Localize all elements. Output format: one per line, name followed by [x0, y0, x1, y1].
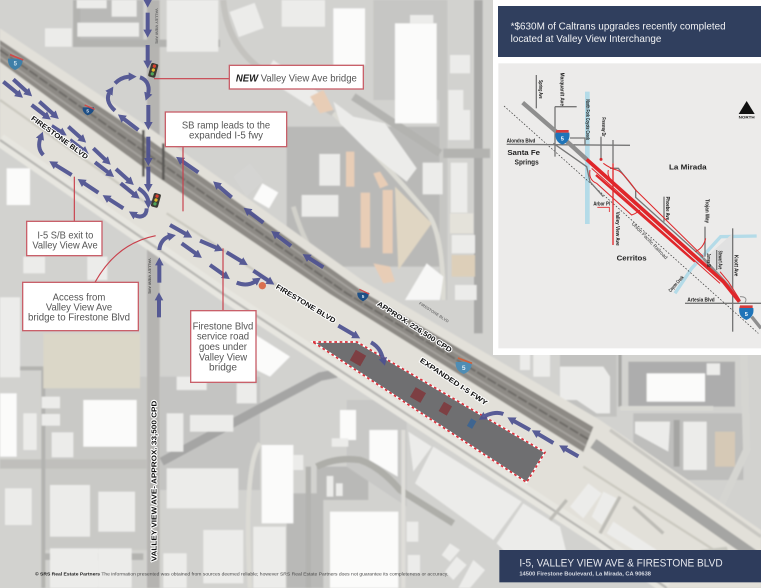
- icon: I-5 shield mid corridor: 5: [362, 294, 365, 299]
- road label: expanded I-5: EXPANDED I-5 FWY: [418, 357, 489, 407]
- traffic flow arrows: [3, 0, 578, 456]
- inset map labels: Freeway Dr: [600, 117, 606, 137]
- inset map labels: Stewart Ave: [717, 251, 723, 269]
- road labels: [29, 8, 489, 561]
- road label: small Firestone: FIRESTONE BLVD: [418, 301, 450, 324]
- railroad: [504, 106, 758, 333]
- shaded adjacent zone: [707, 233, 733, 293]
- callout: service road: bridge: [209, 363, 237, 374]
- callout: SB ramp: expanded I-5 fwy: [189, 131, 263, 142]
- inset map labels: Santa Fe: [507, 150, 540, 157]
- callout: I-5 exit: I-5 S/B exit to: [37, 231, 93, 242]
- inset location map: [498, 63, 761, 348]
- marker: Freeway Dr end point: [600, 158, 602, 161]
- icon: traffic light north: [148, 63, 159, 78]
- inset map labels: Arbor Pl: [593, 201, 611, 207]
- water: creeks: [587, 92, 757, 293]
- gray street grid: [507, 75, 761, 332]
- inset map labels: James St: [705, 253, 711, 268]
- road label: Firestone Blvd east: FIRESTONE BLVD: [274, 284, 336, 325]
- buildings south of the freeway east end: [550, 483, 733, 573]
- icon: traffic light south: [151, 193, 161, 208]
- callout: service road: goes under: [199, 342, 248, 353]
- callout: I-5 exit: Valley View Ave: [32, 240, 98, 251]
- icon: I-5 shield inset south: [739, 305, 754, 320]
- callout: I-5 exit: [27, 177, 102, 256]
- header text: *$630M of Caltrans upgrades recently completed: [511, 22, 726, 33]
- inset map labels: Alondra Blvd: [507, 138, 535, 144]
- inset map labels: Union Pacific Railroad: [630, 221, 669, 261]
- I-5 gray alignment: [523, 103, 761, 328]
- inset map labels: Knott Ave: [732, 255, 738, 277]
- icon: I-5 shield mid corridor: [357, 289, 369, 301]
- callout: new bridge: NEW Valley View Ave bridge: [236, 74, 357, 85]
- property address: 14500 Firestone Boulevard, La Mirada, CA 90638: [519, 571, 651, 577]
- callout: service road: [191, 248, 256, 382]
- road label: Firestone Blvd west: FIRESTONE BLVD: [29, 115, 89, 161]
- inset map labels: Valley View Ave: [614, 212, 620, 246]
- road label: small Valley View south: VALLEY VIEW AVE: [148, 258, 153, 294]
- inset map labels: Trojan Way: [704, 199, 710, 223]
- inset map labels: North Fork Coyote Creek: [584, 99, 590, 140]
- callout: service road: service road: [197, 332, 249, 343]
- inset map labels: Springs: [515, 159, 539, 166]
- icon: I-5 shield inset south: 5: [745, 312, 748, 318]
- callout: access to Firestone: Access from: [53, 293, 105, 304]
- icon: orange marker: [259, 282, 266, 289]
- callout: new bridge: [154, 65, 363, 89]
- red: upgraded I-5 corridor: [587, 159, 740, 302]
- icon: I-5 shield northwest: 5: [14, 62, 18, 68]
- subject site parcel: [313, 342, 545, 482]
- header text: located at Valley View Interchange: [511, 34, 661, 45]
- icon: north arrow: NORTH: [739, 116, 755, 120]
- icon: I-5 shield near bridge: [83, 105, 95, 115]
- callout: service road: Firestone Blvd: [193, 321, 253, 332]
- icon: I-5 shield inset north: [555, 130, 570, 145]
- road label: small Valley View north: VALLEY VIEW AVE: [154, 8, 159, 44]
- inset map labels: Marquardt Ave: [559, 73, 565, 106]
- icon: I-5 shield near bridge: 5: [86, 109, 89, 114]
- icon: I-5 shield southeast: [456, 358, 472, 374]
- road label: Valley View traffic count: VALLEY VIEW AVE- APPROX. 33,500 CPD: [152, 401, 159, 561]
- icon: I-5 shield inset north: 5: [561, 137, 564, 143]
- inset map labels: Coyote Creek: [668, 275, 686, 294]
- icon: I-5 shield northwest: [8, 55, 23, 70]
- property title banner: [499, 550, 761, 582]
- header text: [511, 22, 726, 45]
- header banner: [498, 6, 761, 57]
- callout: access to Firestone: [23, 236, 156, 331]
- inset map labels: Artesia Blvd: [687, 298, 715, 304]
- inset map labels: Phoebe Ave: [664, 197, 670, 220]
- callout: access to Firestone: bridge to Firestone Blvd: [28, 313, 130, 324]
- road label: I-5 traffic count: APPROX. 226,500 CPD: [376, 301, 453, 354]
- icon: I-5 shield southeast: 5: [462, 365, 466, 372]
- icon: north arrow: [739, 101, 755, 120]
- inset map labels: Spring Ave: [537, 80, 543, 99]
- inset map labels: Cerritos: [617, 256, 647, 263]
- disclaimer: © SRS Real Estate Partners The information presented was obtained from sources deemed reliable; however SRS Real Estate Partners does not guarantee its completeness or accuracy.: [35, 572, 448, 577]
- callout: access to Firestone: Valley View Ave: [46, 302, 112, 313]
- inset map labels: La Mirada: [669, 164, 707, 171]
- inset panel backing: [493, 0, 761, 355]
- property name: I-5, VALLEY VIEW AVE & FIRESTONE BLVD: [519, 558, 723, 570]
- callout: service road: Valley View: [199, 352, 247, 363]
- callout: SB ramp: [165, 112, 287, 211]
- site buildings: [350, 350, 476, 429]
- callout: SB ramp: SB ramp leads to the: [182, 120, 270, 131]
- inset map labels: [507, 73, 738, 304]
